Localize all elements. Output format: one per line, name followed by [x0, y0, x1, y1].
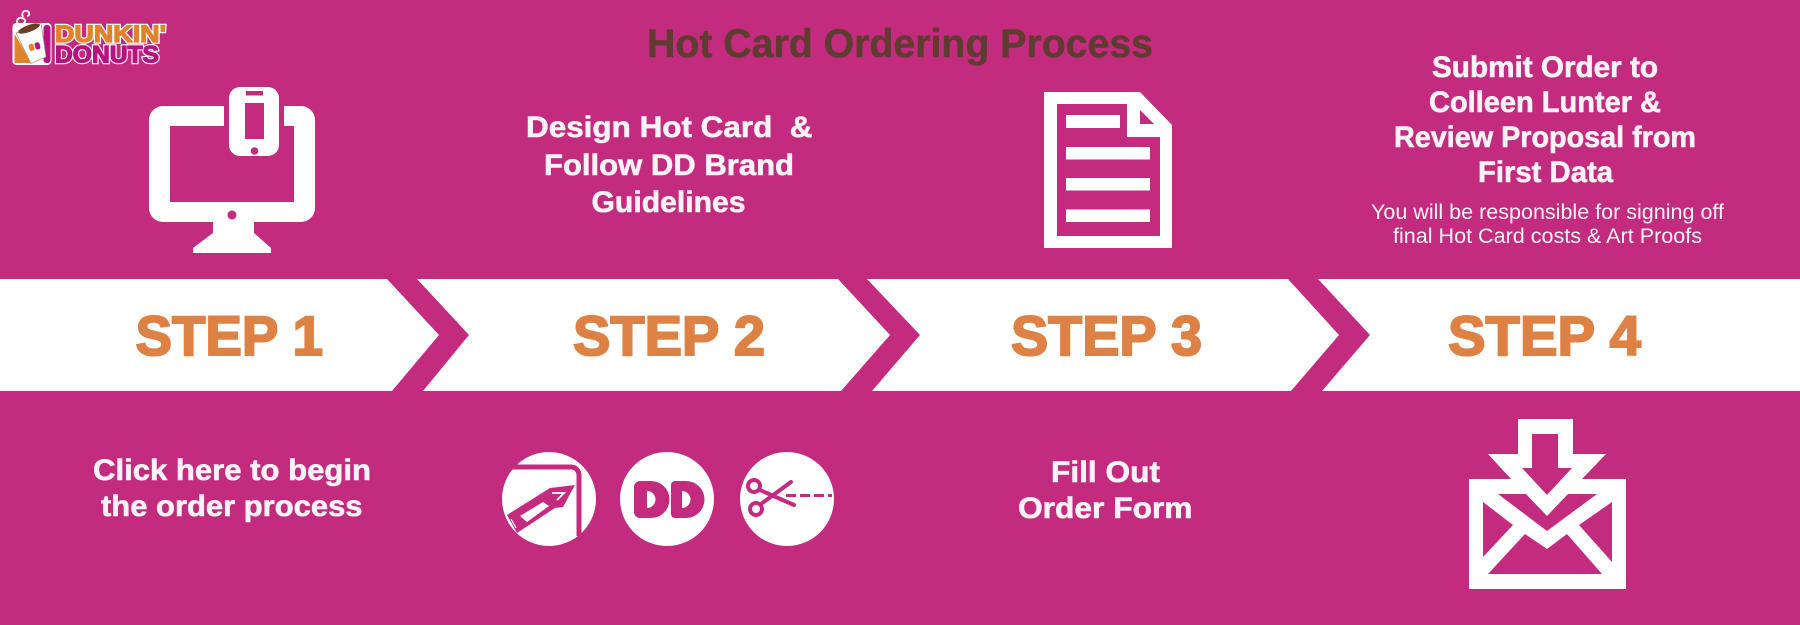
text: submit order: First Data	[1478, 156, 1613, 189]
label: step 3: STEP 3	[1011, 304, 1202, 367]
text: design hot card: Guidelines	[592, 186, 746, 219]
text: submit order: Submit Order to	[1432, 51, 1658, 84]
text: design hot card: Design Hot Card &	[526, 111, 812, 144]
icon: DD circle	[620, 452, 714, 546]
text: fill out order form: Order Form	[1018, 492, 1192, 525]
text: click here	[93, 454, 371, 523]
text: click here: the order process	[101, 490, 362, 523]
chevron: step 1	[0, 279, 439, 391]
label: step 1: STEP 1	[136, 304, 323, 367]
icon: envelope with arrow	[1469, 419, 1626, 589]
logo wordmark: DUNKIN'	[55, 21, 166, 48]
text: click here: Click here to begin	[93, 454, 371, 487]
icon: pencil circle	[502, 452, 596, 546]
chevron: step 2	[417, 279, 890, 391]
text: submit order: Colleen Lunter &	[1429, 86, 1661, 119]
text: submit order	[1394, 51, 1696, 189]
icon: document	[1044, 92, 1172, 248]
text: design hot card	[526, 111, 812, 219]
text: responsibility note: You will be responsible for signing off	[1371, 200, 1724, 224]
text: responsibility note: final Hot Card costs & Art Proofs	[1393, 224, 1702, 248]
text: submit order: Review Proposal from	[1394, 121, 1696, 154]
logo wordmark: DONUTS	[55, 42, 159, 68]
label: step 4: STEP 4	[1448, 304, 1641, 367]
logo wordmark	[55, 21, 166, 68]
label: step 2: STEP 2	[573, 304, 765, 367]
logo: Dunkin' Donuts	[12, 11, 166, 69]
icon: monitor with phone	[149, 87, 315, 253]
panel: step 4	[1318, 51, 1800, 589]
chevron: step 4	[1318, 279, 1800, 391]
panel: step 3	[867, 92, 1339, 525]
logo wordmark: DONUTS	[55, 42, 159, 68]
logo cup panel	[12, 11, 52, 65]
title: Hot Card Ordering Process	[647, 22, 1153, 66]
text: responsibility note	[1371, 200, 1724, 248]
text: fill out order form: Fill Out	[1051, 456, 1160, 489]
logo wordmark: DUNKIN'	[55, 21, 166, 48]
icon: scissors circle	[740, 452, 834, 546]
chevron: step 3	[867, 279, 1339, 391]
panel: step 2	[417, 111, 890, 546]
panel: step 1	[0, 87, 439, 523]
text: fill out order form	[1018, 456, 1192, 525]
text: design hot card: Follow DD Brand	[544, 149, 794, 182]
